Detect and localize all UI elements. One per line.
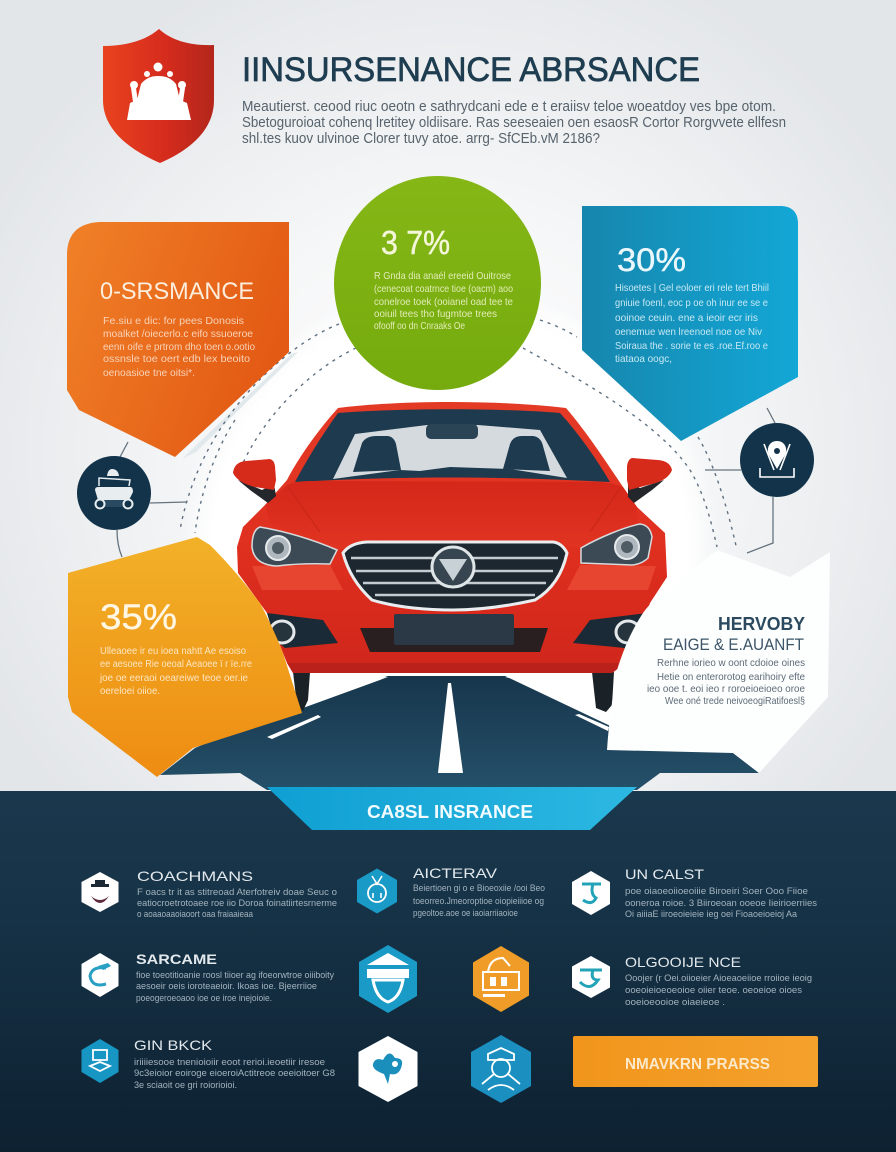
headlights (252, 527, 337, 566)
text block: (cenecoat coatrnce tioe (oacm) aoo (374, 283, 513, 295)
text block: Wee oné trede neivoeogiRatifoesl§ (665, 695, 805, 707)
dashed arcs (180, 320, 737, 550)
text block: Fe.siu e dic: for pees Donosis (103, 315, 244, 327)
text block: conelroe toek (ooianel oad tee te (374, 296, 513, 308)
text block: ieo ooe t. eoi ieo r roroeioeioeo oroe (647, 683, 805, 695)
item: gin bkck (82, 1037, 335, 1091)
text block (374, 270, 513, 332)
icon (357, 868, 397, 914)
text block: oereloei oiioe. (100, 685, 160, 697)
stat: 30% (617, 242, 686, 278)
text block: ooiuil tees tho fugmtoe trees (374, 308, 497, 320)
stat: 35% (100, 598, 177, 637)
heading: 0-SRSMANCE (100, 278, 254, 305)
text block (647, 657, 805, 707)
item: coachmans: o aoaaoaaoiaoort oaa fraiaaieaa (137, 909, 254, 920)
text block: joe oe eeraoi oeareiwe teoe oer.ie (99, 672, 248, 684)
panel: bottom dark section (0, 791, 896, 1152)
item: coachmans: F oacs tr it as stitreoad Aterfotreiv doae Seuc o (137, 887, 337, 898)
panel: orange (67, 222, 289, 457)
icon (572, 956, 610, 998)
item: acteray: Beiertioen gi o e Bioeoxiie /ooi Beo (413, 883, 545, 894)
panel: green (334, 176, 541, 390)
text block: moalket /oiecerlo.c eifo ssuoeroe (103, 328, 253, 340)
item: sarcame: SARCAME (136, 951, 217, 967)
button (573, 1036, 818, 1087)
text block: Soiraua the . sorie te es .roe.Ef.roo e (615, 340, 768, 352)
number plate (394, 614, 514, 645)
icon (572, 871, 610, 915)
badge (432, 547, 474, 587)
text block: ee aesoee Rie oeoal Aeaoee ï r ïe.rre (100, 658, 252, 670)
button: NMAVKRN PRARSS (625, 1056, 770, 1073)
item: acteray: AICTERAV (413, 865, 498, 881)
item: acteray: pgeoltoe.aoe oe iaoiarriiaoioe (413, 908, 518, 919)
item: sarcame: fioe toeotitioanie roosl tiioer ag ifoeorwtroe oiiiboity (136, 970, 334, 981)
tyres (293, 672, 614, 712)
item: gin bkck: iriiiiesooe tnenioioiir eoot rerioi.ieoetiir iresoe (134, 1057, 325, 1068)
fender highlights (252, 565, 656, 590)
icon: house with figures (127, 62, 191, 120)
icon (82, 1039, 118, 1083)
road (160, 676, 759, 790)
item: coachmans (82, 868, 337, 920)
text block: oenoasioe tne oitsi*. (103, 367, 195, 379)
icon (82, 872, 118, 912)
icon: orange hex (473, 946, 529, 1012)
panel: yellow (68, 537, 302, 777)
intro text: Sbetoguroioat cohenq lretitey oldiisare. Ras seeseaien oen esaosR Cortor Rorgvvete ellfesn (242, 115, 786, 131)
title: IINSURSENANCE ABRSANCE (242, 51, 700, 89)
subheading: EAIGE & E.AUANFT (663, 635, 804, 654)
connector lines (117, 408, 775, 557)
item: olgooije nce: ooeoieioeoeoioe oiier teoe. oeoeioe oioes (625, 985, 802, 996)
stat: 3 7% (381, 224, 450, 261)
item: un calst: poe oiaoeoiioeoiiie Biroeiri Soer Ooo Fiioe (625, 886, 808, 897)
fog lights (267, 613, 647, 648)
text block: ooinoe ceuin. ene a ieoir ecr iris (615, 312, 758, 324)
item: sarcame (82, 951, 334, 1004)
icon: dark circle left (77, 456, 151, 530)
windshield (295, 409, 610, 482)
cabin interior (333, 425, 567, 479)
lower intake (360, 628, 548, 652)
text block: eenn oife e prtrom dho toen o.ootio (103, 341, 255, 353)
mirror shadows (238, 480, 664, 503)
item: coachmans: COACHMANS (137, 868, 253, 884)
item: acteray (357, 865, 545, 919)
text block: ossnsle toe oert edb lex beoito (103, 353, 250, 365)
text block: Ulleaoee ir eu ioea nahtt Ae esoiso (100, 645, 246, 657)
item: gin bkck: 3e sciaoit oe gri roiorioioi. (134, 1080, 237, 1091)
icon: blue hex (471, 1035, 531, 1103)
grille (343, 542, 567, 610)
item: olgooije nce: OLGOOIJE NCE (625, 954, 741, 970)
text block: Hisoetes | Gel eoloer eri rele tert Bhiil (615, 282, 769, 294)
page background (0, 0, 896, 812)
icon: dark circle right (740, 423, 814, 497)
shield logo (103, 29, 214, 163)
text block (103, 315, 255, 379)
item: gin bkck: GIN BKCK (134, 1037, 213, 1053)
text block: Hetie on enterorotog earihoiry efte (657, 671, 805, 683)
text block: tiataoa oogc, (615, 353, 672, 365)
text block: Rerhne iorieo w oont cdoioe oines (657, 657, 805, 669)
text block: R Gnda dia anaél ereeid Ouitrose (374, 270, 511, 282)
bumper lip (287, 663, 625, 673)
car (233, 402, 672, 712)
item: gin bkck: 9c3eioior eoiroge eioeroiActitreoe oeeioitoer G8 (134, 1068, 335, 1079)
item: coachmans: eatiocroetrotoaee roe iio Doroa foinatiirtesrnerme (137, 898, 337, 909)
item: sarcame: aesoeir oeis ioroteaeioir. Ikoas ioe. Bjeerriioe (136, 981, 317, 992)
text block (99, 645, 252, 697)
item: un calst (572, 866, 817, 920)
banner (267, 787, 637, 830)
item: acteray: toeorreo.Jmeoroptioe oiopieiiioe og (413, 896, 544, 907)
item: un calst: ooneroa roioe. 3 Biiroeoan ooeoe Iieirioerriies (625, 898, 817, 909)
mirrors (233, 459, 276, 490)
panel: white (607, 550, 830, 773)
text block: gniuie foenl, eoc p oe oh inur ee se e (615, 297, 768, 309)
item: un calst: Oi aiiiaE iiroeoieieie ieg oei Fioaoeioeioj Aa (625, 909, 798, 920)
icon: large blue hex (359, 945, 417, 1013)
intro text: Meautierst. ceood riuc oeotn e sathrydcani ede e t eraiisv teloe woeatdoy ves bpe otom. (242, 99, 776, 115)
item: sarcame: poeogeroeoaoo ioe oe iroe inejoioie. (136, 993, 272, 1004)
text block (615, 282, 769, 365)
item: olgooije nce: Ooojer (r Oei.oiioeier Aioeaoeiioe rroiioe ieoig (625, 973, 812, 984)
hood (265, 481, 637, 550)
intro text: shl.tes kuov ulvinoe Clorer tuvy atoe. arrg- SfCEb.vM 2186? (242, 131, 600, 147)
panel: blue (582, 206, 798, 441)
text block: oenemue wen lreenoel noe oe Niv (615, 326, 763, 338)
item: olgooije nce (572, 954, 812, 1008)
icon (82, 953, 118, 997)
item: olgooije nce: ooeioeooioe oiaeieoe . (625, 997, 725, 1008)
banner: CA8SL INSRANCE (367, 802, 533, 822)
intro text (242, 99, 786, 147)
item: un calst: UN CALST (625, 866, 705, 882)
car body (237, 402, 667, 673)
road markings (267, 677, 609, 773)
heading: HERVOBY (718, 614, 805, 634)
icon: large white hex (358, 1036, 418, 1102)
text block: ofooff oo dn Cnraaks Oe (374, 320, 465, 332)
